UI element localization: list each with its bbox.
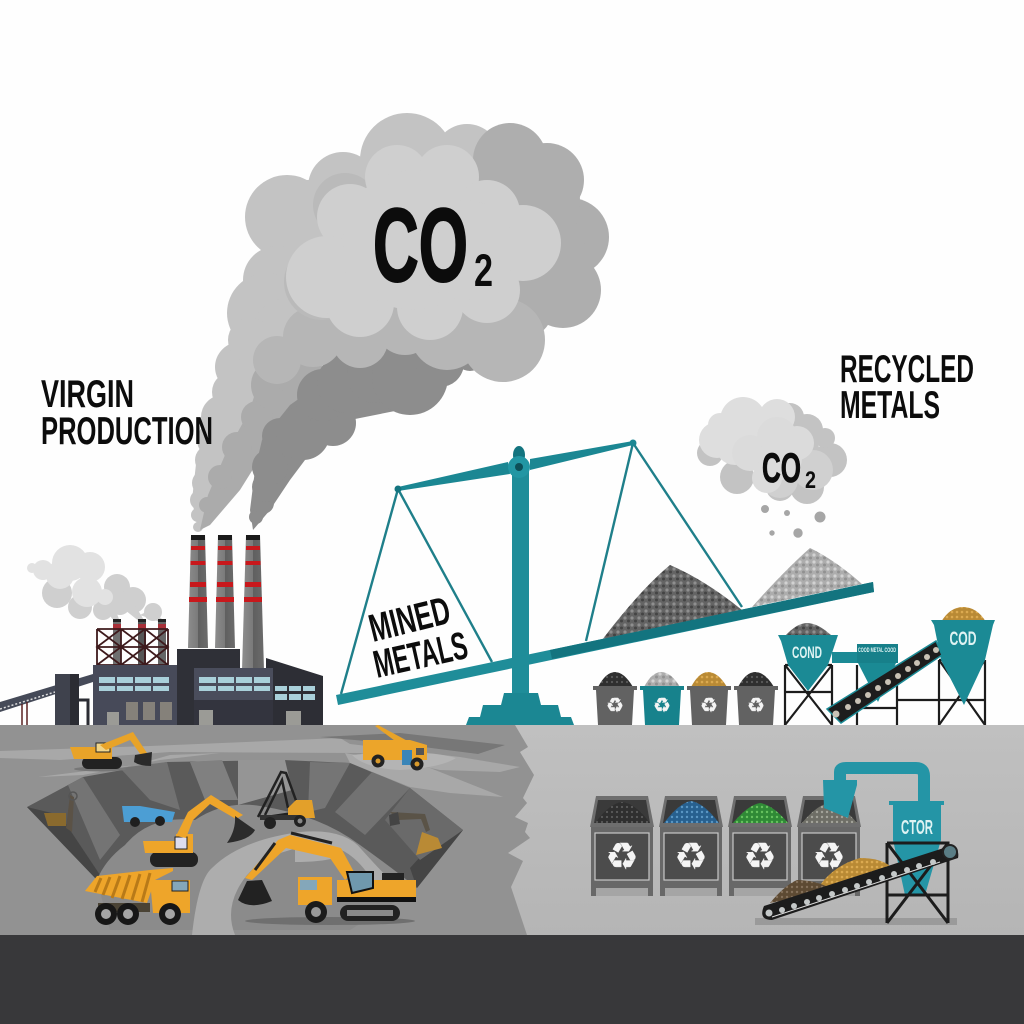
ground: recycling side xyxy=(500,725,1024,935)
pit floor xyxy=(97,805,417,930)
mined metals label: METALS xyxy=(370,624,472,687)
left light lobes and stem xyxy=(190,113,500,532)
cyclone xyxy=(889,801,944,895)
belt xyxy=(762,846,958,920)
recycling bins row above ground xyxy=(593,672,778,725)
surface roads xyxy=(0,738,520,772)
inner cloud shadow xyxy=(284,173,377,320)
small CO2 cloud xyxy=(697,397,847,538)
big CO2 label: 2 xyxy=(474,245,493,296)
tall stacks xyxy=(188,535,264,670)
factory doors xyxy=(107,702,301,725)
brown pile xyxy=(770,880,826,903)
scale pivot xyxy=(394,440,636,492)
scale top beam xyxy=(398,441,633,491)
scale base xyxy=(466,693,574,725)
scale tilted plank xyxy=(336,582,874,705)
inner light cloud xyxy=(286,145,561,340)
processing hoppers and conveyor xyxy=(778,607,995,725)
small drill rig: pit left xyxy=(44,792,77,832)
conveyor to factory xyxy=(0,674,93,725)
hopper 3: COD xyxy=(950,629,976,650)
factory buildings xyxy=(177,649,240,725)
pit walls xyxy=(27,760,463,888)
hopper 1 xyxy=(778,623,838,691)
factory xyxy=(0,535,323,725)
small CO2 label: CO xyxy=(762,444,801,491)
large recycling bins: ♻ xyxy=(674,835,708,878)
scale post xyxy=(512,465,529,695)
bedrock strip xyxy=(0,935,1024,1024)
scale plank dark section xyxy=(550,582,874,659)
dark stem xyxy=(249,339,486,530)
pipe xyxy=(840,768,924,802)
hopper 3 xyxy=(931,607,995,705)
right darker lobes xyxy=(470,123,609,343)
conveyor belt xyxy=(827,641,942,723)
shadow xyxy=(755,918,957,925)
recycling bins row above ground: ♻ xyxy=(747,693,765,717)
recycling bins row above ground: ♻ xyxy=(606,693,624,717)
large recycling bins: ♻ xyxy=(743,835,777,878)
connector and hopper 2 xyxy=(832,644,898,702)
ore pile: mined metals xyxy=(602,565,742,640)
haul road xyxy=(192,831,395,935)
excavator: top left xyxy=(70,732,152,772)
stand xyxy=(887,843,948,923)
lower medium lobes xyxy=(253,295,545,384)
blue dump truck xyxy=(122,806,175,827)
heading: recycled metals xyxy=(840,348,974,427)
truck with crane: top right xyxy=(363,725,427,770)
yellow dump truck xyxy=(85,868,190,925)
big CO2 smoke plume and cloud xyxy=(190,113,609,532)
pit wall facets xyxy=(27,760,463,888)
large recycling bins xyxy=(590,796,861,896)
ore pile: recycled metals xyxy=(752,548,862,607)
middle stem xyxy=(199,342,322,530)
chute xyxy=(823,780,857,818)
open pit mine xyxy=(0,733,520,935)
small CO2 label: 2 xyxy=(805,467,816,494)
cyclone separator and conveyor xyxy=(755,768,958,925)
orange pile xyxy=(820,858,890,892)
large excavator xyxy=(238,833,416,925)
big CO2 label: CO xyxy=(373,188,468,304)
recycling bins row above ground: ♻ xyxy=(700,693,718,717)
factory windows xyxy=(99,677,315,700)
hopper stands xyxy=(785,660,985,725)
large recycling bins: ♻ xyxy=(812,835,846,878)
connector and hopper 2: COOD METAL COOD xyxy=(858,648,896,654)
short stacks and scaffold xyxy=(97,619,168,665)
large recycling bins: ♻ xyxy=(605,835,639,878)
mined metals label xyxy=(365,589,472,687)
heading: virgin production xyxy=(41,373,213,453)
mined metals label: MINED xyxy=(365,589,455,651)
secondary smoke cloud xyxy=(27,545,166,622)
heading: recycled metals: METALS xyxy=(840,384,940,427)
medium excavator xyxy=(143,795,255,867)
cyclone separator and conveyor: CTOR xyxy=(901,817,933,839)
heading: virgin production: PRODUCTION xyxy=(41,410,213,453)
scale hanger lines xyxy=(341,443,742,694)
ground: mining side xyxy=(0,725,534,935)
recycling bins row above ground: ♻ xyxy=(653,693,671,717)
black lattice crane truck xyxy=(258,772,315,829)
hopper 1: COND xyxy=(792,643,822,662)
heading: virgin production: VIRGIN xyxy=(41,373,134,416)
small excavator: pit right xyxy=(389,812,442,855)
balance scale xyxy=(336,440,874,725)
